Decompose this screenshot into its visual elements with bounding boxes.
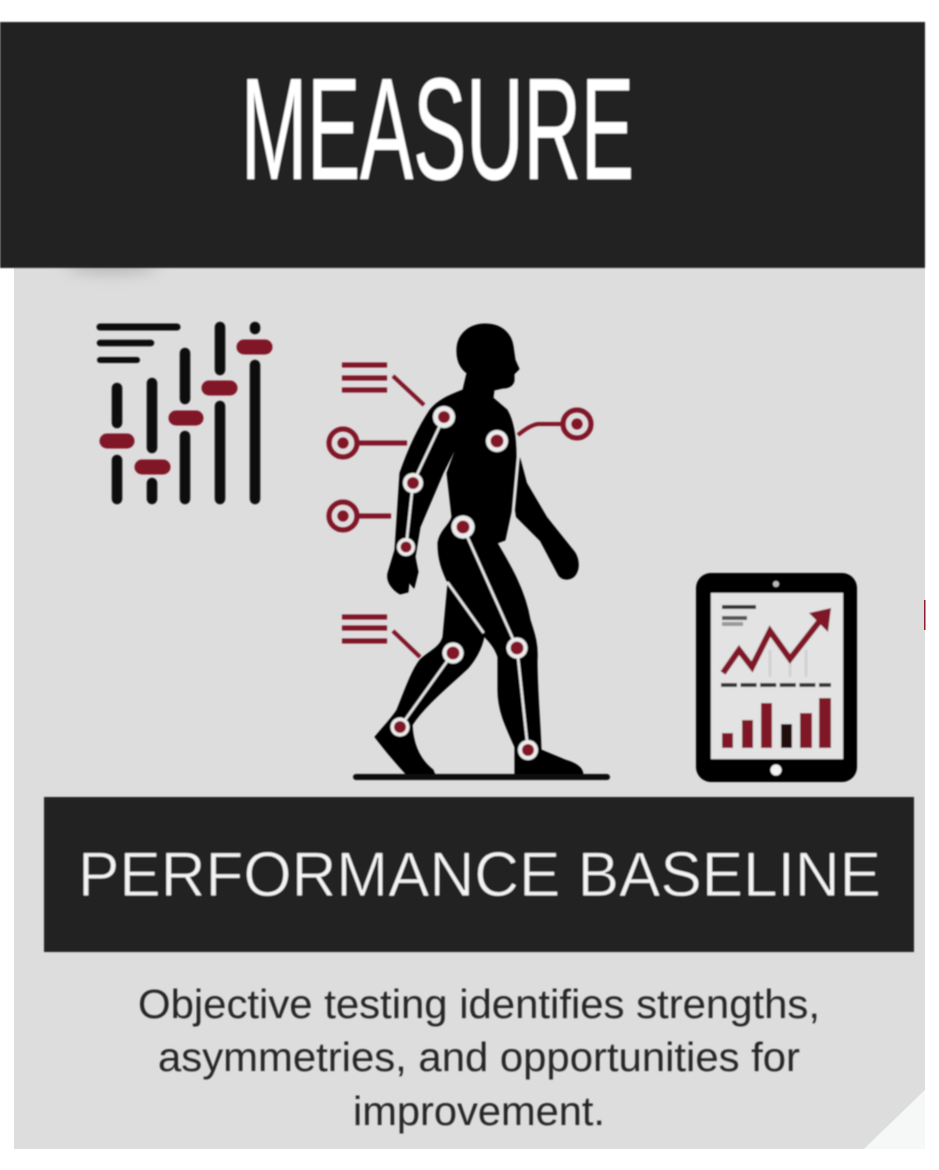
far arm [515,457,579,580]
callout: lower note lines [342,617,420,657]
banner: performance baseline [44,797,914,952]
banner heading: PERFORMANCE BASELINE [78,840,881,910]
skeleton lines [400,417,528,750]
header band [0,22,925,268]
panel: grey background [14,255,926,1149]
callout: target right [518,410,591,438]
icon: human figure with sensor points [329,324,607,777]
bar chart [722,698,831,748]
callout: upper note lines [342,365,424,405]
icon: sliders [100,327,265,499]
silhouette [375,324,583,775]
description text: Objective testing identifies strengths, [138,981,820,1027]
joint markers [390,406,538,760]
description text: improvement. [353,1088,605,1134]
ground line [356,774,607,780]
description text: asymmetries, and opportunities for [158,1034,800,1080]
callout: target left upper [329,429,407,457]
callout: target left lower [329,502,391,530]
title: MEASURE [241,48,634,210]
dashed divider [721,683,831,687]
tablet text lines [722,607,756,624]
line chart arrow [723,608,831,673]
description text [138,981,820,1134]
icon: tablet with charts [696,573,857,782]
faint columns [770,650,806,677]
